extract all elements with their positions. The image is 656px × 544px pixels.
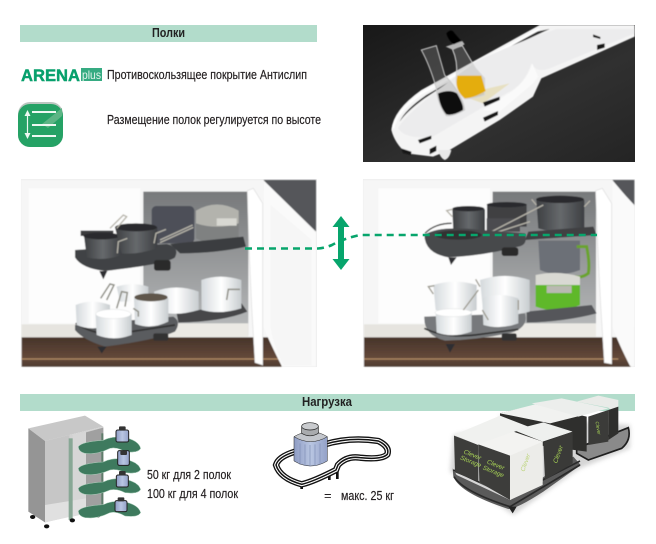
box labels [459,444,565,480]
dashed line: shelf level [245,235,597,248]
top shelf [170,237,246,253]
lower white pots [433,282,477,313]
lower shelf [177,303,247,323]
text: height adjustable: Размещение полок регулируется по высоте [107,113,321,127]
box labels: Storage [482,465,505,480]
heading bar: Нагрузка: Нагрузка [302,395,353,409]
heading bar: Полки [20,25,317,42]
text: maximum 25 kg [324,488,394,503]
illustration: cabinet with four loaded shelves [28,416,141,528]
arrow: height adjustment [332,216,350,270]
right shelf [577,428,629,460]
weights [115,426,129,512]
photo: shelves with storage boxes [450,396,630,515]
box labels: Clever [486,459,506,472]
rail [393,29,540,128]
cabinet corner [263,180,316,232]
box labels: Clever [462,449,483,462]
upper shelf [525,227,597,240]
lower shelf [527,305,597,323]
heading bar: Нагрузка [20,394,635,411]
carafe left [421,46,465,116]
carafe right [452,46,485,99]
text: load per shelf set: 100 кг для 4 полок [147,487,238,501]
text: load per shelf set [147,468,238,501]
clips [401,34,605,155]
box labels: Storage [459,455,483,470]
front shelf boxes [454,436,478,482]
photo: cabinet with shelves, low position [21,179,317,367]
icon: adjustable shelf height [18,102,63,147]
top shelf front pots [81,231,113,236]
illustration: weight on shelf [276,423,388,489]
heading bar: Полки: Полки [152,26,185,40]
gap behind rail [400,29,550,122]
foot [438,150,451,160]
back shelf boxes [500,405,587,452]
box labels: Clever [552,444,565,464]
text: maximum 25 kg: = [324,488,332,503]
box labels: Clever [520,452,533,473]
photo: shelves with storage boxes: Clever [595,421,602,436]
logo: ARENA plus: plus [82,68,101,82]
photo: shelf with carafes on dark background [363,25,635,162]
shelves [78,437,141,518]
text: anti-slip coating: Противоскользящее покрытие Антислип [107,68,307,82]
upper pots [487,204,527,227]
logo: ARENA plus: ARENA [21,67,80,85]
top shelf back pots [152,206,194,243]
text: maximum 25 kg: макс. 25 кг [341,489,394,503]
board [398,29,635,137]
front shelf [453,457,581,509]
lower shelf white pots [201,277,241,312]
door [247,188,263,365]
chrome rim [391,25,635,157]
food processor [538,241,580,274]
door [596,188,612,364]
photo: cabinet with shelves, raised position [363,179,635,367]
text: load per shelf set: 50 кг для 2 полок [147,468,231,482]
